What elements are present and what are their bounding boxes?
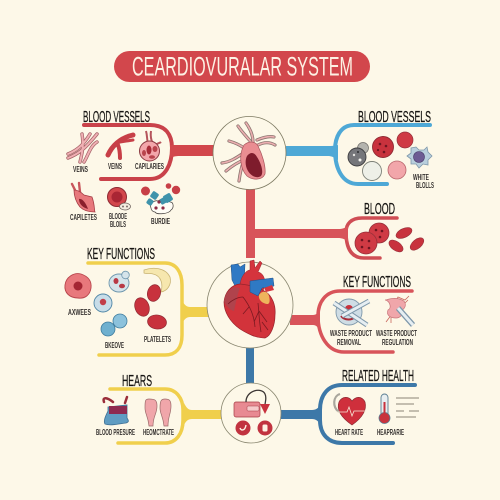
icon: veins pink	[68, 134, 97, 162]
icon: capillaries	[140, 131, 161, 161]
icon: red vessel	[108, 135, 133, 158]
label: waste product removal: REMOVAL	[337, 338, 361, 347]
panel: key functions right	[290, 274, 417, 352]
label: heart rate: HEART RATE	[335, 428, 363, 437]
label: bkeove: BKEOVE	[105, 341, 124, 350]
panel: blood	[255, 201, 426, 258]
icon: waste removal	[334, 299, 369, 325]
central trunk connectors	[246, 188, 255, 386]
panel: related health	[281, 368, 419, 443]
icon: axwees cell	[65, 274, 91, 298]
bracket: blood vessels right	[286, 125, 430, 184]
icon: blood cell	[108, 188, 130, 210]
icon: mixed cells cluster	[141, 183, 180, 214]
title banner: CEARDIOVURALAR SYSTEM	[132, 52, 353, 82]
label: burdie: BURDIE	[151, 217, 170, 226]
bracket: blood	[255, 218, 397, 258]
circle: anatomical heart	[207, 260, 293, 348]
label: bloode bloils: BLOILS	[110, 220, 126, 229]
label: axwees: AXWEES	[68, 308, 91, 317]
icon: heart	[224, 260, 275, 338]
title banner	[114, 51, 370, 82]
label: bloode bloils: BLOODE	[109, 212, 127, 221]
panel: blood vessels left	[68, 109, 216, 229]
label: capillaries: CAPILARIES	[135, 162, 164, 171]
label: waste product removal	[330, 329, 372, 347]
heading: blood vessels right: BLOOD VESSELS	[358, 109, 431, 126]
label: waste product removal: WASTE PRODUCT	[330, 329, 372, 338]
label: bloode bloils	[109, 212, 127, 229]
label: waste product regulation: WASTE PRODUCT	[376, 329, 417, 338]
icon: blue cells	[94, 271, 129, 336]
heading: blood: BLOOD	[364, 201, 395, 218]
heading: related health: RELATED HEALTH	[342, 368, 414, 385]
label: white bloils: BLOLLS	[416, 181, 434, 190]
bracket: related health	[281, 385, 415, 443]
panel: hears	[96, 373, 222, 443]
label: blood presure: BLOOD PRESURE	[96, 428, 135, 437]
label: waste product regulation: REGULATION	[382, 338, 413, 347]
icon: waste regulation	[385, 296, 413, 325]
label: veins 2: VEINS	[108, 162, 122, 171]
heading: blood vessels left: BLOOD VESSELS	[83, 109, 150, 126]
label: veins: VEINS	[73, 165, 88, 174]
label: white bloils: WHITE	[413, 173, 429, 182]
label: heaprarie: HEAPRARIE	[377, 428, 404, 437]
heading: key functions left: KEY FUNCTIONS	[87, 246, 155, 263]
panel: key functions left	[65, 246, 210, 355]
icon: blood cells group	[348, 132, 432, 180]
arrow: cycle	[246, 390, 270, 414]
panel: blood vessels right	[286, 109, 434, 190]
icon: cuff	[234, 402, 260, 417]
icon: blood pressure	[104, 397, 128, 425]
bracket: blood vessels left	[84, 125, 216, 179]
circle: circulation cycle	[221, 383, 281, 443]
icon: red badge left	[236, 420, 250, 436]
icon: heart rate tissue	[145, 399, 171, 426]
circle: vessel cross-section	[213, 116, 286, 190]
label: waste product regulation	[376, 329, 417, 347]
bracket: key functions right	[290, 291, 412, 352]
icon: platelets	[132, 268, 170, 330]
icon: thermometer	[379, 394, 390, 424]
icon: reading lines	[396, 398, 419, 417]
icon: heart rate	[334, 394, 366, 425]
bracket: key functions left	[88, 263, 210, 355]
heading: hears: HEARS	[122, 373, 152, 390]
bracket: hears	[110, 389, 222, 443]
icon: capillary chamber	[72, 183, 95, 212]
icon: red blood cells	[355, 223, 426, 254]
label: heomctrate: HEOMCTRATE	[143, 428, 174, 437]
heading: key functions right: KEY FUNCTIONS	[343, 274, 411, 291]
icon: red badge right	[258, 420, 272, 436]
label: capiletes: CAPILETES	[70, 213, 97, 222]
label: white bloils	[413, 173, 434, 190]
label: platelets: PLATELETS	[144, 335, 171, 344]
